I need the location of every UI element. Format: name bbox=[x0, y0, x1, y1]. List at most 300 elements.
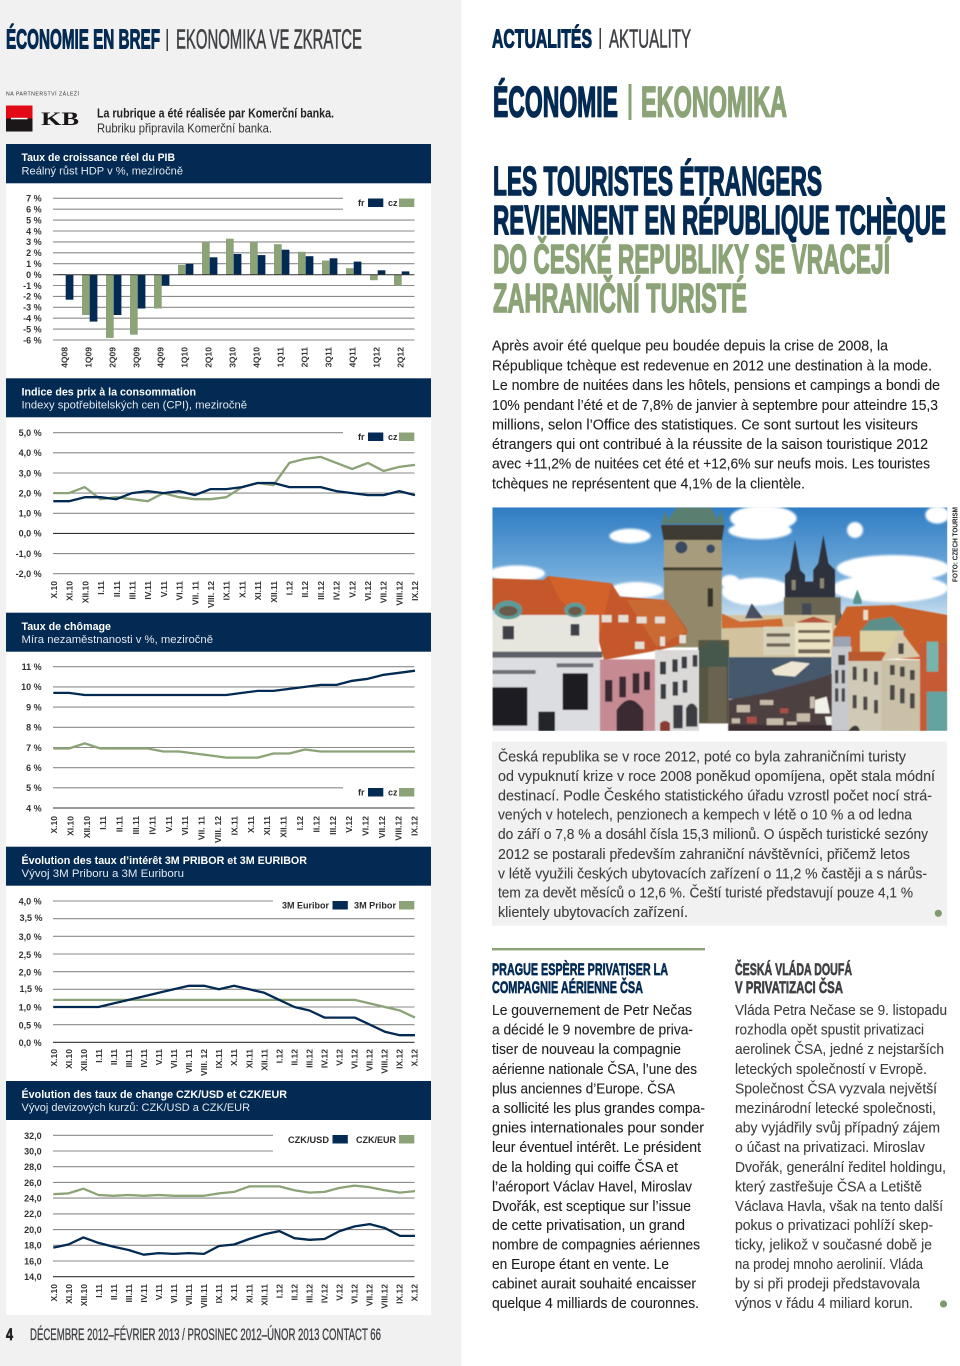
legend bbox=[288, 1135, 414, 1145]
text block: French intro: étrangers qui ont contribué à la réussite de la saison touristique 2012 bbox=[492, 437, 928, 453]
heading band: unemployment: Míra nezaměstnanosti v %, meziročně bbox=[22, 634, 213, 646]
heading: actualités: AKTUALITY bbox=[609, 25, 691, 53]
x axis labels: 2Q09 bbox=[108, 347, 118, 368]
y axis labels: 4,0 % bbox=[19, 448, 42, 458]
article: French CSA bbox=[492, 948, 705, 1312]
text block: Czech intro: 2012 se postarali především zahraniční návštěvníci, přičemž letos bbox=[498, 847, 910, 863]
y axis labels: -1 % bbox=[23, 281, 42, 291]
text block: CSA fr: quelque 4 milliards de couronnes. bbox=[492, 1296, 699, 1312]
square and crowd bbox=[728, 657, 850, 731]
x axis labels: IV.11 bbox=[139, 1284, 149, 1303]
y axis labels: 10 % bbox=[21, 682, 42, 692]
y axis labels: 30,0 bbox=[24, 1146, 42, 1156]
x axis labels: III.12 bbox=[316, 581, 326, 600]
y axis labels: 7 % bbox=[26, 194, 42, 204]
x axis labels: VII.12 bbox=[379, 581, 389, 603]
x axis labels: XI.10 bbox=[64, 1049, 74, 1069]
x axis labels: X.10 bbox=[49, 1284, 59, 1302]
partner tagline: NA PARTNERSTVÍ ZÁLEŽÍ bbox=[6, 90, 80, 98]
y axis labels: 2 % bbox=[26, 248, 42, 258]
y axis labels: 3,5 % bbox=[19, 913, 42, 923]
y axis labels: 5,0 % bbox=[19, 428, 42, 438]
heading: économie en bref: ÉCONOMIE EN BREF bbox=[6, 24, 160, 54]
heading band: GDP bbox=[6, 144, 431, 183]
x axis labels: XII.11 bbox=[269, 581, 279, 603]
text block: CSA cz: na prodej mnoho aerolinií. Vláda bbox=[735, 1257, 923, 1273]
text block: CSA cz: Vláda Petra Nečase se 9. listopadu bbox=[735, 1003, 947, 1019]
heading band: CPI bbox=[6, 378, 431, 417]
x axis labels: IX.12 bbox=[409, 816, 419, 836]
text block: French intro: Après avoir été quelque peu boudée depuis la crise de 2008, la bbox=[492, 339, 888, 355]
x axis labels: V.11 bbox=[164, 816, 174, 832]
x axis labels: I.11 bbox=[94, 1284, 104, 1298]
y axis labels: 9 % bbox=[26, 702, 42, 712]
x axis labels: XI.10 bbox=[65, 581, 75, 601]
legend: fr bbox=[358, 788, 365, 798]
line: cz CPI bbox=[53, 457, 415, 501]
text block: CSA fr: Dvořák, est sceptique sur l’issue bbox=[492, 1199, 691, 1215]
heading band: unemployment bbox=[6, 613, 431, 652]
panel: GDP growth chart bbox=[6, 144, 431, 368]
legend: CZK/EUR bbox=[356, 1135, 396, 1145]
heading band: interest rates bbox=[6, 847, 431, 886]
x axis labels: IV.12 bbox=[319, 1049, 329, 1068]
x axis labels: 1Q10 bbox=[180, 347, 190, 368]
sponsor note bbox=[97, 106, 334, 136]
x axis labels: IX.11 bbox=[222, 581, 232, 600]
x axis labels: V.11 bbox=[159, 581, 169, 597]
text block: CSA cz: o účast na privatizaci. Miroslav bbox=[735, 1140, 926, 1156]
y axis labels: -4 % bbox=[23, 314, 42, 324]
x axis labels: II.12 bbox=[311, 816, 321, 833]
icon: KB logo bbox=[6, 106, 79, 132]
x axis labels: XI.11 bbox=[262, 816, 272, 835]
text block: Czech intro: od vypuknutí krize v roce 2008 poněkud opomíjena, opět stala módní bbox=[498, 769, 935, 785]
x axis labels: 1Q12 bbox=[372, 347, 382, 368]
x axis labels: II.11 bbox=[112, 581, 122, 597]
y axis labels: 0 % bbox=[26, 270, 42, 280]
x axis labels: VI.12 bbox=[349, 1049, 359, 1069]
x axis labels: IX.12 bbox=[394, 1284, 404, 1304]
x axis labels: VII.11 bbox=[184, 1284, 194, 1306]
text block: French intro: République tchèque est redevenue en 2012 une destination à la mode. bbox=[492, 358, 932, 374]
y axis labels: -5 % bbox=[23, 324, 42, 334]
text block: CSA fr: nombre de compagnies aériennes bbox=[492, 1237, 700, 1253]
heading: section économie: ÉCONOMIE bbox=[493, 79, 618, 127]
text block: CSA cz: rozhodla opět spustit privatizaci bbox=[735, 1023, 924, 1039]
x axis labels: XII.11 bbox=[279, 816, 289, 838]
headline bbox=[493, 158, 946, 321]
y axis labels bbox=[19, 896, 42, 1048]
x axis labels bbox=[49, 816, 419, 843]
x axis labels: IX.11 bbox=[214, 1284, 224, 1303]
y axis labels: 2,0 % bbox=[19, 488, 42, 498]
footer: page number and issue: 4 bbox=[6, 1325, 13, 1344]
x axis labels: II.11 bbox=[115, 816, 125, 832]
x axis labels: VIII.11 bbox=[199, 1284, 209, 1308]
heading: Prague CSA bbox=[492, 960, 668, 997]
y axis labels: 1,5 % bbox=[19, 984, 42, 994]
x axis labels: X.11 bbox=[229, 1049, 239, 1066]
x axis labels: X.11 bbox=[246, 816, 256, 833]
x axis labels: III.12 bbox=[304, 1049, 314, 1068]
text block: CSA fr: de la holding qui coiffe ČSA et bbox=[492, 1159, 678, 1176]
x axis labels: VII.12 bbox=[364, 1284, 374, 1306]
x axis labels: III.11 bbox=[128, 581, 138, 599]
text block: Czech intro: destinací. Podle Českého statistického úřadu vzrostl počet nocí strá- bbox=[498, 787, 932, 804]
y axis labels: 5 % bbox=[26, 215, 42, 225]
x axis labels: XI.10 bbox=[64, 1284, 74, 1304]
text block: French intro: tchèques ne représentent que 4,1% de la clientèle. bbox=[492, 476, 805, 492]
right buildings bbox=[832, 589, 947, 731]
panel: left page background bbox=[0, 0, 462, 1366]
text block: CSA cz: Dvořák, generální ředitel holdingu, bbox=[735, 1160, 946, 1176]
bars: cz series bbox=[58, 239, 402, 338]
text block: CSA fr: aérienne nationale ČSA, l’une des bbox=[492, 1061, 697, 1078]
legend bbox=[282, 900, 414, 910]
y axis labels: 0,0 % bbox=[19, 1038, 42, 1048]
x axis labels: X.12 bbox=[410, 1049, 420, 1066]
legend bbox=[358, 198, 414, 208]
heading band: GDP: Reálný růst HDP v %, meziročně bbox=[22, 166, 183, 178]
x axis labels: VIII.12 bbox=[394, 581, 404, 606]
x axis labels: VIII. 12 bbox=[206, 581, 216, 608]
text block: CSA fr: l’aéroport Václav Havel, Miroslav bbox=[492, 1179, 693, 1195]
y axis labels: 6 % bbox=[26, 204, 42, 214]
x axis labels: 1Q09 bbox=[84, 347, 94, 368]
text block: CSA fr: a décidé le 9 novembre de priva- bbox=[492, 1023, 693, 1039]
x axis labels: 2Q12 bbox=[396, 347, 406, 368]
x axis labels: X.10 bbox=[49, 581, 59, 598]
x axis labels: VII. 11 bbox=[197, 816, 207, 840]
heading band: CPI: Indice des prix à la consommation bbox=[22, 387, 196, 399]
x axis labels: 2Q11 bbox=[300, 347, 310, 367]
x axis labels: XII.10 bbox=[79, 1049, 89, 1071]
x axis labels: VI.12 bbox=[361, 816, 371, 836]
x axis labels: VIII. 12 bbox=[213, 816, 223, 843]
line: CZK/USD bbox=[53, 1224, 415, 1255]
heading: Czech CSA: V PRIVATIZACI ČSA bbox=[735, 978, 843, 997]
legend: CZK/USD bbox=[288, 1135, 330, 1145]
sponsor note: La rubrique a été réalisée par Komerční banka. bbox=[97, 106, 334, 120]
line: fr CPI bbox=[53, 483, 415, 501]
text block: French intro: Le nombre de nuitées dans les hôtels, pensions et campings a bondi de bbox=[492, 378, 940, 394]
x axis labels: III.11 bbox=[124, 1284, 134, 1302]
x axis labels: XI.10 bbox=[65, 816, 75, 836]
x axis labels: VIII.12 bbox=[393, 816, 403, 841]
x axis labels: III.11 bbox=[124, 1049, 134, 1067]
x axis labels: II.12 bbox=[289, 1049, 299, 1066]
panel: unemployment chart bbox=[6, 613, 431, 843]
x axis labels: I.11 bbox=[94, 1049, 104, 1063]
y axis labels: 18,0 bbox=[24, 1241, 42, 1251]
x axis labels: XI.11 bbox=[244, 1284, 254, 1303]
text block: French intro: 10% pendant l’été et de 7,8% de janvier à septembre pour atteindre 15,3 bbox=[492, 398, 938, 414]
x axis labels: V.12 bbox=[344, 816, 354, 833]
heading band: CPI: Indexy spotřebitelských cen (CPI), meziročně bbox=[22, 400, 247, 412]
x axis labels: 4Q09 bbox=[156, 347, 166, 368]
y axis labels: 4,0 % bbox=[19, 896, 42, 906]
heading band: interest rates: Évolution des taux d’intérêt 3M PRIBOR et 3M EURIBOR bbox=[22, 854, 307, 867]
x axis labels: I.12 bbox=[274, 1049, 284, 1063]
y axis labels bbox=[21, 662, 42, 813]
x axis labels bbox=[49, 581, 420, 608]
x axis labels: 2Q10 bbox=[204, 347, 214, 368]
panel: interest rates chart bbox=[6, 847, 431, 1076]
x axis labels: III.12 bbox=[304, 1284, 314, 1303]
y axis labels: 3,0 % bbox=[19, 932, 42, 942]
x axis labels: VI.11 bbox=[169, 1049, 179, 1068]
church towers bbox=[722, 535, 842, 658]
text block: French intro: millions, selon l’Office des statistiques. Ce sont surtout les visiteurs bbox=[492, 417, 918, 433]
text block: Czech intro: klientely ubytovacích zařízení. bbox=[498, 905, 688, 921]
x axis labels: IX.12 bbox=[394, 1049, 404, 1069]
x axis labels: V.11 bbox=[154, 1284, 164, 1300]
y axis labels: 1,0 % bbox=[19, 509, 42, 519]
x axis labels: II.11 bbox=[109, 1284, 119, 1300]
article: Czech CSA bbox=[735, 960, 947, 1312]
legend: fr bbox=[358, 432, 365, 442]
x axis labels: IV.11 bbox=[147, 816, 157, 835]
x axis labels: I.12 bbox=[295, 816, 305, 830]
x axis labels: I.11 bbox=[98, 816, 108, 830]
y axis labels: 1 % bbox=[26, 259, 42, 269]
y axis labels bbox=[23, 194, 42, 345]
text block: CSA cz: leteckých společností v Evropě. bbox=[735, 1062, 927, 1078]
heading band: exchange rates bbox=[6, 1081, 431, 1120]
panel: CPI chart bbox=[6, 378, 431, 608]
x axis labels bbox=[60, 347, 406, 368]
x axis labels: V.12 bbox=[334, 1284, 344, 1301]
legend: fr bbox=[358, 198, 365, 208]
text block: CSA fr: de cette privatisation, un grand bbox=[492, 1218, 685, 1234]
legend: 3M Pribor bbox=[354, 900, 396, 910]
text block: French intro bbox=[492, 339, 940, 492]
x axis labels: VII. 11 bbox=[190, 581, 200, 605]
y axis labels: 24,0 bbox=[24, 1194, 42, 1204]
y axis labels: 3,0 % bbox=[19, 468, 42, 478]
x axis labels: V.12 bbox=[347, 581, 357, 598]
photo credit: FOTO: CZECH TOURISM bbox=[950, 507, 960, 582]
x axis labels: III.12 bbox=[328, 816, 338, 835]
legend: cz bbox=[388, 198, 398, 208]
text block: CSA fr: tiser de nouveau la compagnie bbox=[492, 1042, 681, 1058]
y axis labels: 4 % bbox=[26, 226, 42, 236]
text block: CSA cz: aerolinek ČSA, jedné z nejstarších bbox=[735, 1041, 944, 1058]
text block: CSA fr: Le gouvernement de Petr Nečas bbox=[492, 1003, 692, 1019]
legend: cz bbox=[388, 788, 398, 798]
x axis labels: V.12 bbox=[334, 1049, 344, 1066]
legend bbox=[358, 788, 414, 798]
x axis labels: VII.12 bbox=[377, 816, 387, 838]
y axis labels: -2 % bbox=[23, 292, 42, 302]
heading band: GDP: Taux de croissance réel du PIB bbox=[22, 152, 175, 164]
x axis labels: VIII.12 bbox=[379, 1049, 389, 1074]
text block: CSA fr: leur éventuel intérêt. Le président bbox=[492, 1140, 701, 1156]
x axis labels: 3Q11 bbox=[324, 347, 334, 367]
x axis labels: XII.11 bbox=[259, 1049, 269, 1071]
x axis labels bbox=[49, 1049, 420, 1076]
text block: French intro: avec +11,2% de nuitées cet été et +12,6% sur neufs mois. Les touristes bbox=[492, 457, 930, 473]
y axis labels: 32,0 bbox=[24, 1131, 42, 1141]
x axis labels: VII.12 bbox=[364, 1049, 374, 1071]
x axis labels: 4Q11 bbox=[348, 347, 358, 367]
x axis labels: VIII.12 bbox=[379, 1284, 389, 1309]
heading: Czech CSA bbox=[735, 960, 852, 997]
x axis labels: VI.12 bbox=[363, 581, 373, 601]
line: 3M Euribor bbox=[53, 986, 415, 1035]
y axis labels: 1,0 % bbox=[19, 1002, 42, 1012]
x axis labels: I.11 bbox=[96, 581, 106, 595]
icon: KB logo: KB bbox=[41, 109, 79, 130]
x axis labels: III.11 bbox=[131, 816, 141, 834]
text block: CSA fr: a sollicité les plus grandes compa- bbox=[492, 1101, 705, 1117]
text block: CSA cz: mezinárodní letecké společnosti, bbox=[735, 1101, 936, 1117]
text block: CSA cz: aby vyjádřily svůj případný zájem bbox=[735, 1121, 940, 1137]
heading: actualités: ACTUALITÉS bbox=[492, 24, 592, 53]
footer: page number and issue bbox=[6, 1325, 381, 1344]
y axis labels: 5 % bbox=[26, 783, 42, 793]
text block: CSA cz: Václava Havla, však na tento další bbox=[735, 1199, 943, 1215]
text block: CSA cz: pokus o privatizaci pohlíží skep- bbox=[735, 1218, 933, 1234]
text block: Czech intro bbox=[498, 749, 935, 921]
y axis labels: 2,0 % bbox=[19, 967, 42, 977]
panel: Czech intro box bbox=[492, 742, 947, 926]
legend: 3M Euribor bbox=[282, 900, 329, 910]
line: 3M Pribor bbox=[53, 1000, 415, 1018]
x axis labels: XII.10 bbox=[79, 1284, 89, 1306]
y axis labels: 14,0 bbox=[24, 1272, 42, 1282]
x axis labels: XII.11 bbox=[259, 1284, 269, 1306]
line: CZK/EUR bbox=[53, 1186, 415, 1196]
x axis labels: IV.11 bbox=[139, 1049, 149, 1068]
x axis labels: IV.11 bbox=[143, 581, 153, 600]
text block: Czech intro: tem za devět měsíců o 12,6 %. Čeští turisté představují pouze 4,1 % bbox=[498, 885, 913, 902]
x axis labels: VIII. 12 bbox=[199, 1049, 209, 1076]
x axis labels: 3Q09 bbox=[132, 347, 142, 368]
heading band: exchange rates: Vývoj devizových kurzů: CZK/USD a CZK/EUR bbox=[22, 1102, 250, 1114]
x axis labels: X.11 bbox=[237, 581, 247, 598]
text block: CSA cz: který zastřešuje ČSA a Letiště bbox=[735, 1178, 922, 1195]
heading: Prague CSA: PRAGUE ESPÈRE PRIVATISER LA bbox=[492, 960, 668, 979]
x axis labels: XI.11 bbox=[244, 1049, 254, 1068]
heading: section économie: EKONOMIKA bbox=[641, 79, 787, 127]
y axis labels: 28,0 bbox=[24, 1162, 42, 1172]
text block: CSA fr: cabinet aurait souhaité encaisser bbox=[492, 1276, 696, 1292]
x axis labels: VI.12 bbox=[349, 1284, 359, 1304]
x axis labels: V.11 bbox=[154, 1049, 164, 1065]
x axis labels: IV.12 bbox=[319, 1284, 329, 1303]
photo: Prague Old Town Square bbox=[488, 506, 950, 731]
x axis labels: VI.11 bbox=[175, 581, 185, 600]
heading: économie en bref: EKONOMIKA VE ZKRATCE bbox=[176, 24, 362, 54]
x axis labels: 1Q11 bbox=[276, 347, 286, 367]
y axis labels: 2,5 % bbox=[19, 950, 42, 960]
x axis labels: X.10 bbox=[49, 816, 59, 834]
text block: Czech intro: v létě využili českých ubytovacích zařízení o 11,2 % častěji a s nárůs- bbox=[498, 866, 927, 882]
heading band: unemployment: Taux de chômage bbox=[22, 621, 111, 633]
y axis labels bbox=[16, 428, 42, 579]
x axis labels: I.12 bbox=[284, 581, 294, 595]
y axis labels: 4 % bbox=[26, 803, 42, 813]
text block: CSA cz: ticky, jelikož v současné době je bbox=[735, 1237, 932, 1253]
text block: CSA fr: plus anciennes d’Europe. ČSA bbox=[492, 1080, 675, 1097]
icon: end dot bbox=[940, 1300, 947, 1308]
x axis labels: 3Q10 bbox=[228, 347, 238, 368]
footer: page number and issue: DÉCEMBRE 2012–FÉVRIER 2013 / PROSINEC 2012–ÚNOR 2013 CONTACT 66 bbox=[30, 1325, 381, 1344]
x axis labels: I.12 bbox=[274, 1284, 284, 1298]
x axis labels: XII.10 bbox=[80, 581, 90, 603]
x axis labels: IX.12 bbox=[410, 581, 420, 601]
x axis labels: 4Q08 bbox=[60, 347, 70, 368]
text block: CSA fr: gnies internationales pour sonder bbox=[492, 1121, 704, 1137]
text block: CSA fr: en Europe étant en vente. Le bbox=[492, 1257, 669, 1273]
y axis labels: 3 % bbox=[26, 237, 42, 247]
y axis labels: 0,5 % bbox=[19, 1020, 42, 1030]
x axis labels: II.12 bbox=[300, 581, 310, 598]
text block: CSA cz: Společnost ČSA vyzvala největší bbox=[735, 1080, 937, 1097]
text block: CSA cz bbox=[735, 1003, 947, 1312]
y axis labels: -3 % bbox=[23, 303, 42, 313]
y axis labels: 11 % bbox=[22, 662, 42, 672]
text block: CSA cz: výnos v řádu 4 miliard korun. bbox=[735, 1296, 913, 1312]
bars: fr series bbox=[66, 250, 409, 322]
y axis labels: 22,0 bbox=[24, 1209, 42, 1219]
headline: ZAHRANIČNÍ TURISTÉ bbox=[493, 275, 747, 321]
y axis labels: 20,0 bbox=[24, 1225, 42, 1235]
line: cz unemployment bbox=[53, 743, 415, 758]
x axis labels: II.12 bbox=[289, 1284, 299, 1301]
x axis labels: IX.11 bbox=[229, 816, 239, 835]
panel: charts background bbox=[6, 183, 431, 1315]
heading band: interest rates: Vývoj 3M Priboru a 3M Euriboru bbox=[22, 868, 184, 880]
legend: cz bbox=[388, 432, 398, 442]
text block: Czech intro: do září o 7,8 % a dosáhl čísla 15,3 milionů. O úspěch turistické sezóny bbox=[498, 827, 929, 843]
x axis labels: X.11 bbox=[229, 1284, 239, 1301]
x axis labels: II.11 bbox=[109, 1049, 119, 1065]
text block: Czech intro: vených v hotelech, penzionech a kempech v létě o 10 % a od ledna bbox=[498, 808, 912, 824]
x axis labels: XI.11 bbox=[253, 581, 263, 600]
heading: Prague CSA: COMPAGNIE AÉRIENNE ČSA bbox=[492, 978, 643, 997]
x axis labels: X.10 bbox=[49, 1049, 59, 1066]
text block: Czech intro: Česká republika se v roce 2012, poté co byla zahraničními turisty bbox=[498, 749, 907, 766]
text block: CSA cz: by si při prodeji představovala bbox=[735, 1276, 920, 1292]
x axis labels: VI.11 bbox=[169, 1284, 179, 1303]
y axis labels: 6 % bbox=[26, 763, 42, 773]
x axis labels bbox=[49, 1284, 420, 1309]
y axis labels: 16,0 bbox=[24, 1256, 42, 1266]
panel: exchange rates chart bbox=[6, 1081, 431, 1309]
y axis labels: -2,0 % bbox=[16, 569, 42, 579]
left roofs bbox=[492, 576, 699, 731]
y axis labels: -6 % bbox=[23, 335, 42, 345]
y axis labels: 0,0 % bbox=[19, 529, 42, 539]
heading band: exchange rates: Évolution des taux de change CZK/USD et CZK/EUR bbox=[22, 1088, 287, 1101]
y axis labels: 26,0 bbox=[24, 1178, 42, 1188]
heading: Czech CSA: ČESKÁ VLÁDA DOUFÁ bbox=[735, 960, 852, 979]
old town hall tower bbox=[661, 507, 729, 723]
text block: CSA fr bbox=[492, 1003, 705, 1312]
y axis labels: -1,0 % bbox=[16, 549, 42, 559]
x axis labels: VI.11 bbox=[180, 816, 190, 835]
x axis labels: 4Q10 bbox=[252, 347, 262, 368]
x axis labels: IV.12 bbox=[332, 581, 342, 600]
y axis labels: 7 % bbox=[26, 743, 42, 753]
line: fr unemployment bbox=[53, 671, 415, 695]
y axis labels bbox=[24, 1131, 42, 1282]
x axis labels: IX.11 bbox=[214, 1049, 224, 1068]
sponsor note: Rubriku připravila Komerční banka. bbox=[97, 120, 272, 136]
